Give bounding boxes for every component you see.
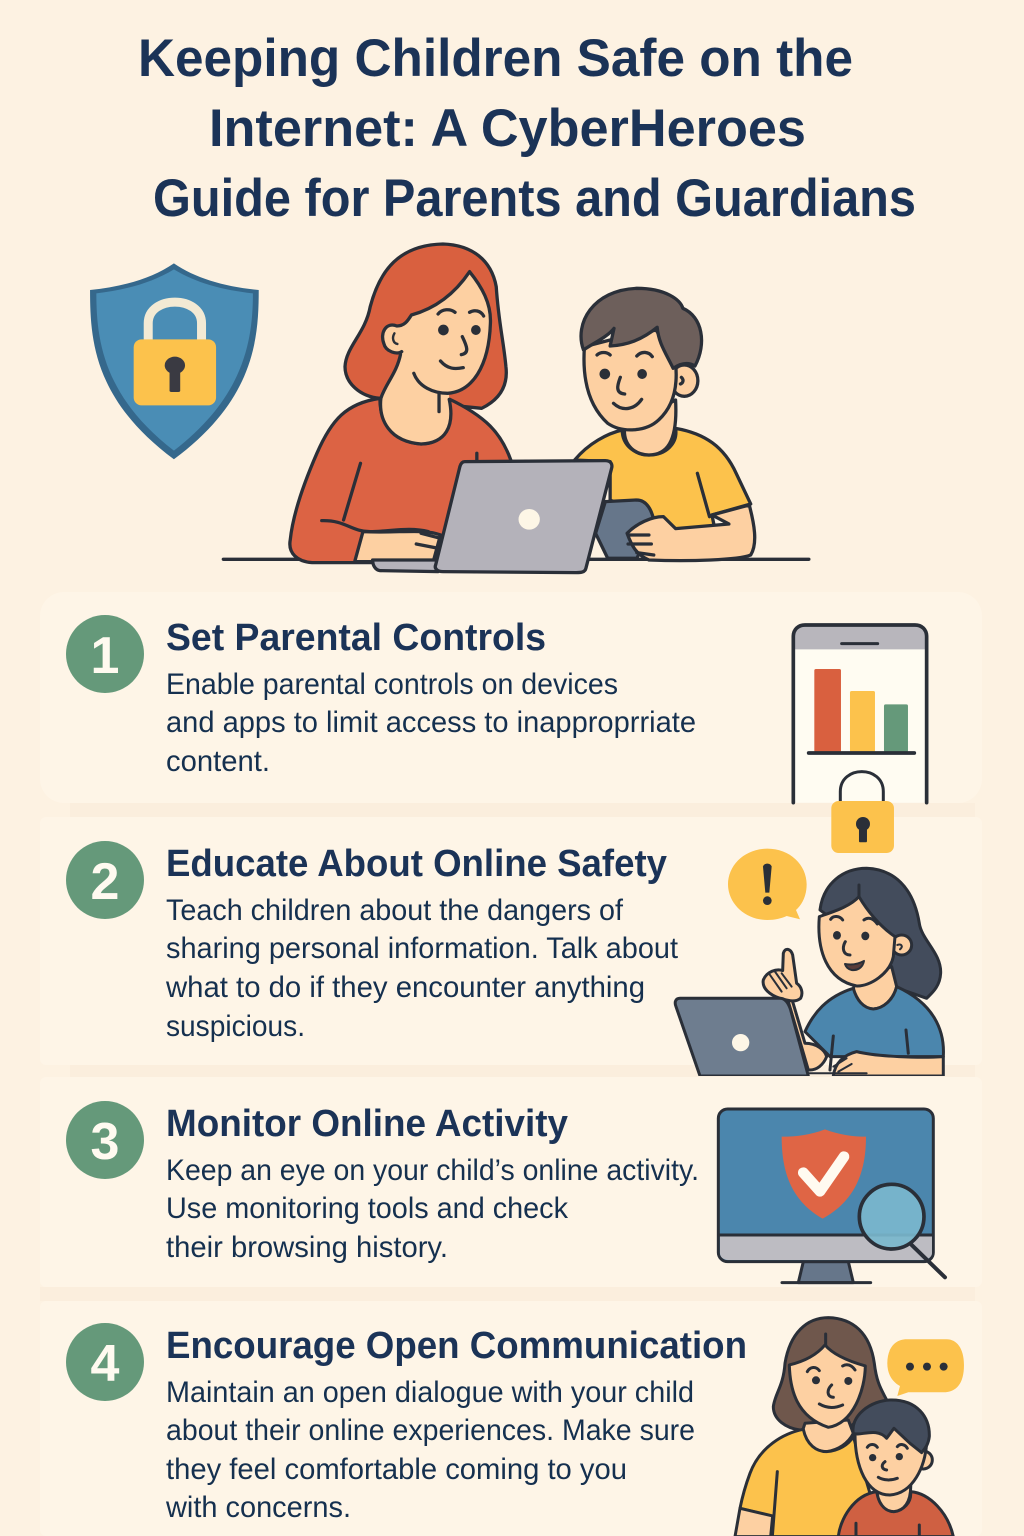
- icon: dots speech bubble: [887, 1339, 964, 1396]
- panel: step 4 background: [40, 1301, 982, 1536]
- text: step 2 body: sharing personal information. Talk about: [166, 932, 679, 965]
- step 2 content: [66, 841, 679, 1043]
- text: step 1 body: [166, 668, 696, 778]
- icon: alert speech bubble: [728, 849, 807, 920]
- table line: [223, 558, 809, 561]
- illustration: girl at laptop: [675, 868, 943, 1076]
- text: step 3 body: Use monitoring tools and check: [166, 1192, 569, 1225]
- heading: Set Parental Controls: Set Parental Controls: [166, 617, 546, 659]
- divider strip 1: [70, 803, 975, 817]
- number badge 1: 1: [91, 627, 119, 685]
- heading: Encourage Open Communication: Encourage Open Communication: [166, 1325, 747, 1367]
- illustrations for steps 1 and 2: [675, 625, 943, 1076]
- divider strip 3: [40, 1287, 975, 1301]
- laptop: [373, 461, 612, 573]
- heading: Monitor Online Activity: Monitor Online Activity: [166, 1103, 568, 1145]
- text: step 3 body: their browsing history.: [166, 1231, 448, 1264]
- text: step 2 body: suspicious.: [166, 1010, 305, 1043]
- mother: [290, 244, 511, 563]
- number badge 3: [66, 1101, 144, 1179]
- illustration: mother and child talking: [735, 1318, 953, 1536]
- heading: Educate About Online Safety: Educate About Online Safety: [166, 843, 667, 885]
- text: step 3 body: [166, 1154, 699, 1264]
- text: step 2 body: what to do if they encounter anything: [165, 971, 645, 1004]
- text: step 1 body: content.: [166, 745, 270, 778]
- step 3 content: [66, 1101, 699, 1264]
- number badge 4: [66, 1323, 144, 1401]
- icon: shield with padlock: [90, 263, 259, 459]
- number badge 2: [66, 841, 144, 919]
- divider strip 2: [70, 1065, 975, 1077]
- step 1 content: [66, 615, 696, 778]
- title: Internet: A CyberHeroes: [209, 99, 806, 158]
- text: step 3 body: Keep an eye on your child’s online activity.: [166, 1154, 699, 1187]
- text: step 4 body: [165, 1376, 695, 1524]
- number badge 2: 2: [91, 853, 119, 911]
- text: step 1 body: Enable parental controls on devices: [166, 668, 618, 701]
- number badge 4: 4: [91, 1335, 120, 1393]
- icon: monitor with shield and magnifier: [718, 1109, 945, 1283]
- step 4 content: [66, 1323, 747, 1524]
- boy: [575, 288, 755, 561]
- text: step 1 body: and apps to limit access to inapproprriate: [166, 706, 696, 739]
- number badge 3: 3: [91, 1113, 119, 1171]
- number badge 1: [66, 615, 144, 693]
- panel: step 2 background: [40, 817, 982, 1065]
- title: [138, 29, 916, 228]
- panel: step 3 background: [40, 1077, 982, 1287]
- text: step 4 body: they feel comfortable coming to you: [166, 1453, 627, 1486]
- icon: padlock: [831, 772, 894, 853]
- text: step 2 body: Teach children about the dangers of: [166, 894, 624, 927]
- illustrations for steps 3 and 4: [718, 1109, 964, 1536]
- text: step 4 body: about their online experiences. Make sure: [166, 1414, 695, 1447]
- hero illustration: [90, 244, 809, 573]
- title: Guide for Parents and Guardians: [153, 169, 916, 228]
- text: step 4 body: Maintain an open dialogue with your child: [166, 1376, 694, 1409]
- title: Keeping Children Safe on the: [138, 29, 853, 88]
- text: step 2 body: [165, 894, 679, 1043]
- panel: step 1 background: [40, 592, 982, 803]
- text: step 4 body: with concerns.: [165, 1491, 351, 1524]
- icon: phone with bar chart: [793, 625, 927, 803]
